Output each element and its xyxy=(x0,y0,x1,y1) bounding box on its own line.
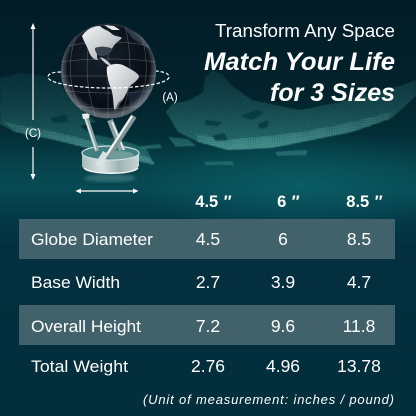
bright lower map edges xyxy=(196,112,392,150)
graticule xyxy=(60,24,157,118)
base reflection xyxy=(84,174,136,182)
row: overall height: 11.8 xyxy=(343,316,375,336)
row: base width: Base Width xyxy=(31,274,120,292)
dotted world map xyxy=(0,70,416,165)
row: total weight xyxy=(31,356,381,376)
base width arrow xyxy=(76,188,138,194)
label C: (C) xyxy=(25,128,41,140)
globe sphere xyxy=(60,24,157,118)
table header: 8.5 ″ xyxy=(346,193,383,211)
table header xyxy=(195,193,383,211)
row: overall height: Overall Height xyxy=(31,318,141,336)
size table xyxy=(19,193,395,376)
heading: Match Your Life xyxy=(204,48,395,76)
row: total weight: 4.96 xyxy=(266,356,300,376)
heading: for 3 Sizes xyxy=(270,79,395,107)
label A: (A) xyxy=(162,92,178,104)
heading: Transform Any Space xyxy=(215,21,395,41)
row: total weight: Total Weight xyxy=(31,358,128,376)
row: total weight: 2.76 xyxy=(191,356,225,376)
row: overall height: 7.2 xyxy=(196,316,220,336)
row: globe diameter: 6 xyxy=(278,229,288,249)
row: base width: 2.7 xyxy=(196,272,220,292)
map shadows xyxy=(50,110,268,141)
table header: 6 ″ xyxy=(277,193,300,211)
height arrow (C) xyxy=(30,23,36,180)
row: globe diameter xyxy=(19,219,395,259)
row: overall height: 9.6 xyxy=(271,316,295,336)
row: globe diameter: 4.5 xyxy=(196,229,220,249)
row: base width xyxy=(31,272,371,292)
crystal base xyxy=(82,146,139,173)
row: globe diameter: 8.5 xyxy=(347,229,371,249)
globe on stand xyxy=(60,24,157,182)
table header: 4.5 ″ xyxy=(195,193,232,211)
heading xyxy=(204,21,395,107)
row: globe diameter: Globe Diameter xyxy=(31,231,154,249)
row: base width: 3.9 xyxy=(271,272,295,292)
row: total weight: 13.78 xyxy=(337,356,381,376)
row: overall height xyxy=(19,305,395,345)
row: base width: 4.7 xyxy=(347,272,371,292)
stand legs xyxy=(82,113,134,168)
continents xyxy=(82,25,139,112)
unit note: (Unit of measurement: inches / pound) xyxy=(143,392,394,407)
rotation ring (A) xyxy=(48,71,169,88)
